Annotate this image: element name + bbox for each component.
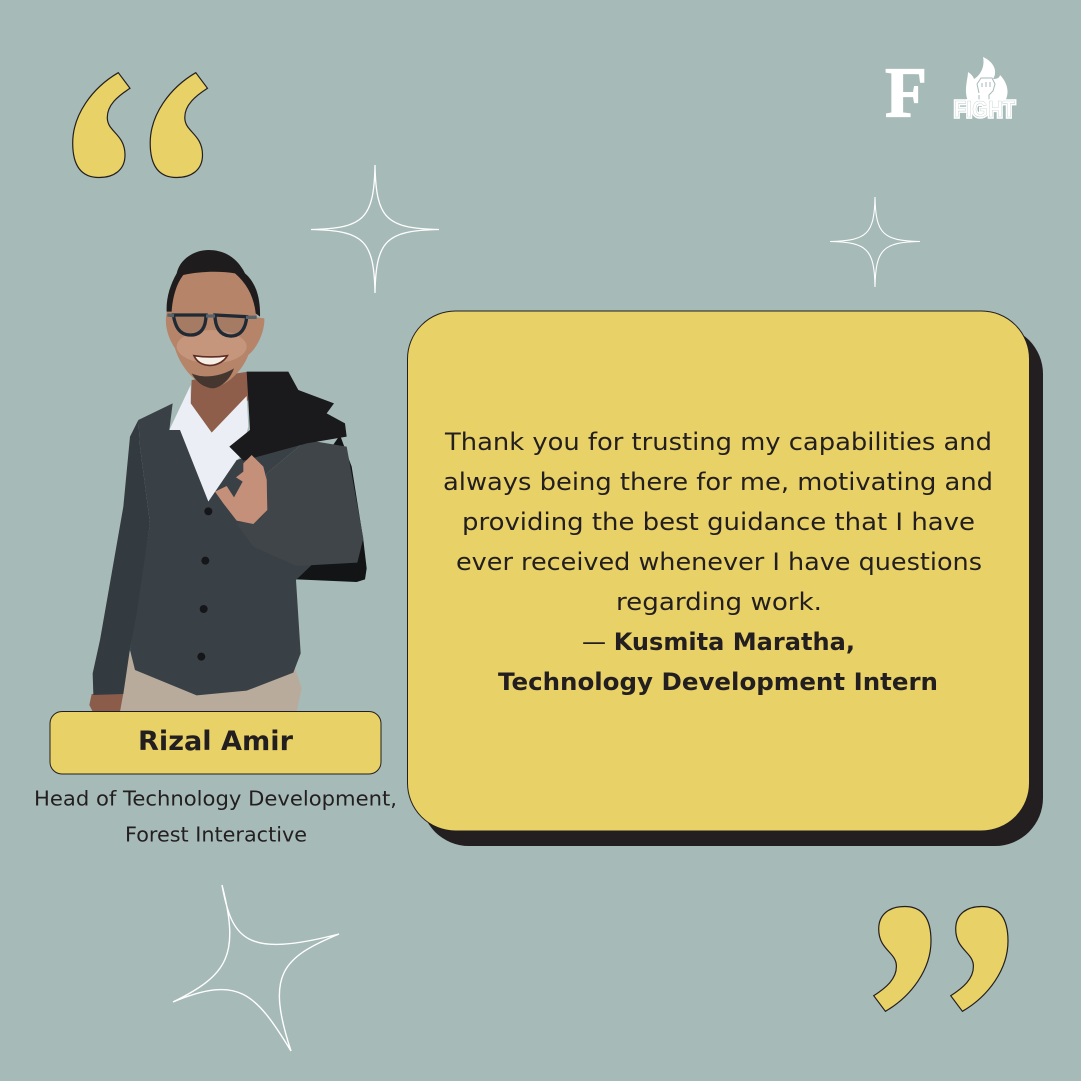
hair	[167, 250, 260, 317]
neck	[191, 372, 248, 433]
cardigan left sleeve	[93, 420, 150, 695]
icon: sparkle large	[311, 165, 439, 293]
quote text: ever received whenever I have questions	[456, 548, 982, 576]
left hand	[89, 693, 123, 712]
beard	[192, 368, 234, 388]
logo: FIGHT: FIGHT	[954, 96, 1015, 122]
jacket behind the arm	[260, 435, 367, 582]
logo: FIGHT: FIGHT	[954, 96, 1015, 122]
job title: Head of Technology Development,	[34, 786, 397, 810]
job title: Forest Interactive	[125, 822, 307, 846]
icon: sparkle tilted	[173, 885, 339, 1051]
smile	[194, 356, 227, 365]
attribution: — Kusmita Maratha,	[582, 628, 855, 656]
attribution	[498, 628, 938, 696]
buttons	[197, 507, 212, 661]
cardigan body	[130, 403, 313, 695]
trousers	[120, 652, 302, 712]
name: Rizal Amir	[138, 726, 294, 757]
job title	[34, 786, 397, 846]
quote text: Thank you for trusting my capabilities and	[444, 428, 992, 456]
quote text: providing the best guidance that I have	[462, 508, 975, 536]
icon: sparkle small	[830, 197, 920, 287]
face	[166, 263, 264, 388]
icon: opening quotation mark	[73, 73, 208, 178]
panel: testimonial quote	[408, 311, 1030, 831]
icon: closing quotation mark	[874, 906, 1008, 1011]
cardigan right sleeve	[237, 440, 363, 566]
hand	[215, 455, 267, 524]
quote text: regarding work.	[616, 588, 822, 616]
quote text	[443, 428, 993, 616]
glasses	[173, 315, 247, 336]
card shadow	[421, 326, 1043, 846]
shoulder jacket	[229, 372, 347, 461]
logo: Forest Interactive F: F	[885, 52, 927, 132]
logo: FIGHT	[954, 57, 1015, 122]
photo: Rizal Amir portrait	[89, 250, 367, 712]
quote text: always being there for me, motivating and	[443, 468, 993, 496]
name badge	[50, 712, 381, 774]
cheek highlight	[177, 330, 247, 363]
attribution: Technology Development Intern	[498, 668, 938, 696]
shirt	[169, 385, 248, 502]
